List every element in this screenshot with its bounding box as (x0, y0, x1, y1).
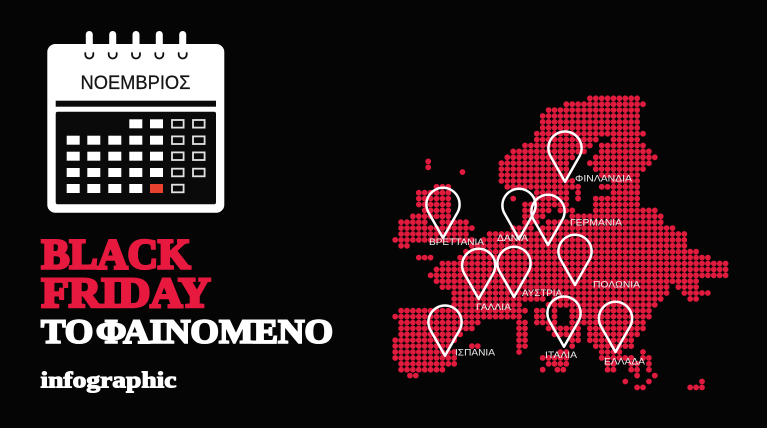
calendar filled day cells (67, 119, 163, 193)
pin and label: Βρεττανία (426, 188, 485, 248)
infographic wordmark: infographic (40, 368, 176, 392)
calendar binder rings (85, 31, 187, 58)
map: dotted Europe (395, 98, 726, 387)
calendar highlighted day (150, 184, 163, 193)
pin and label: Αυστρία (497, 247, 563, 299)
pin and label: Γερμανία: ΓΕΡΜΑΝΙΑ (570, 218, 623, 228)
pin and label: Ιταλία (545, 297, 581, 361)
pin and label: Αυστρία: ΑΥΣΤΡΙΑ (522, 288, 563, 299)
calendar month: ΝΟΕΜΒΡΙΟΣ (80, 72, 190, 94)
calendar grid panel (56, 112, 216, 204)
subtitle: ΤΟ ΦΑΙΝΟΜΕΝΟ (41, 313, 333, 350)
pin and label: Πολωνία: ΠΟΛΩΝΙΑ (593, 280, 641, 290)
pin and label: Γερμανία (531, 195, 623, 245)
pin and label: Ελλάδα: ΕΛΛΑΔΑ (604, 356, 646, 368)
pin and label: Γαλλία (462, 249, 512, 313)
pin and label: Ελλάδα (599, 302, 646, 368)
pin and label: Ισπανία: ΙΣΠΑΝΙΑ (455, 348, 496, 358)
pin and label: Πολωνία (558, 235, 641, 290)
pin and label: Ισπανία (428, 306, 496, 358)
pin and label: Δανία (497, 189, 536, 244)
pin and label: Γαλλία: ΓΑΛΛΙΑ (476, 302, 512, 313)
calendar divider bar (56, 101, 216, 107)
pin and label: Φινλανδία: ΦΙΝΛΑΝΔΙΑ (575, 174, 633, 184)
calendar outlined day cells (172, 120, 205, 192)
pin and label: Δανία: ΔΑΝΙΑ (497, 233, 529, 244)
map dots (395, 98, 726, 387)
title: Black Friday: BLACK (42, 233, 191, 279)
pin and label: Ιταλία: ΙΤΑΛΙΑ (545, 350, 578, 361)
pin and label: Φινλανδία (548, 132, 633, 184)
calendar page (47, 44, 224, 213)
title: Black Friday: FRIDAY (42, 271, 210, 317)
icon: calendar (47, 31, 224, 213)
title: Black Friday (42, 233, 210, 317)
pin and label: Βρεττανία: ΒΡΕΤΤΑΝΙΑ (429, 237, 485, 248)
